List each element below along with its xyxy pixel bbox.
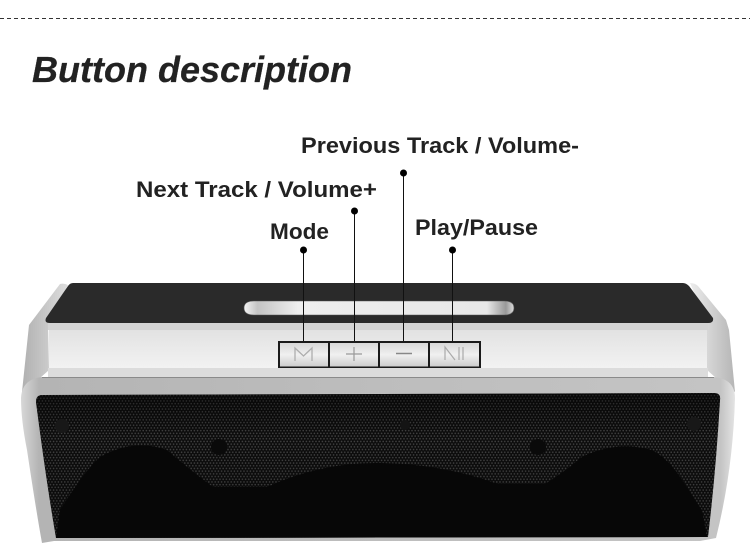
button: plus [330,343,378,366]
speaker body frame [21,377,735,543]
speaker top surface [46,283,713,323]
speaker product image [21,283,735,543]
speaker grille [36,393,720,538]
woofer shadows [56,445,707,538]
label: previous track / volume-: Previous Track / Volume- [301,133,579,158]
dashed divider line [0,18,750,20]
label: mode: Mode [270,219,329,244]
button: mode [280,343,328,366]
button: play/pause [430,343,479,366]
top surface slot [244,301,514,315]
pointer: play/pause [449,246,456,341]
speaker left shoulder [22,284,68,392]
pointer: previous track [400,170,407,341]
button: minus [380,343,428,366]
label: next track / volume+: Next Track / Volume+ [136,177,377,202]
button row [278,341,481,368]
speaker front band [49,330,707,368]
grille dimple holes [211,439,227,455]
label: play/pause: Play/Pause [415,215,538,240]
pointer: next track [351,208,358,341]
title: Button description [32,49,352,90]
lower light strip [48,368,708,378]
pointer: mode [300,246,307,341]
top edge strip [48,323,708,330]
speaker right shoulder [690,283,735,392]
